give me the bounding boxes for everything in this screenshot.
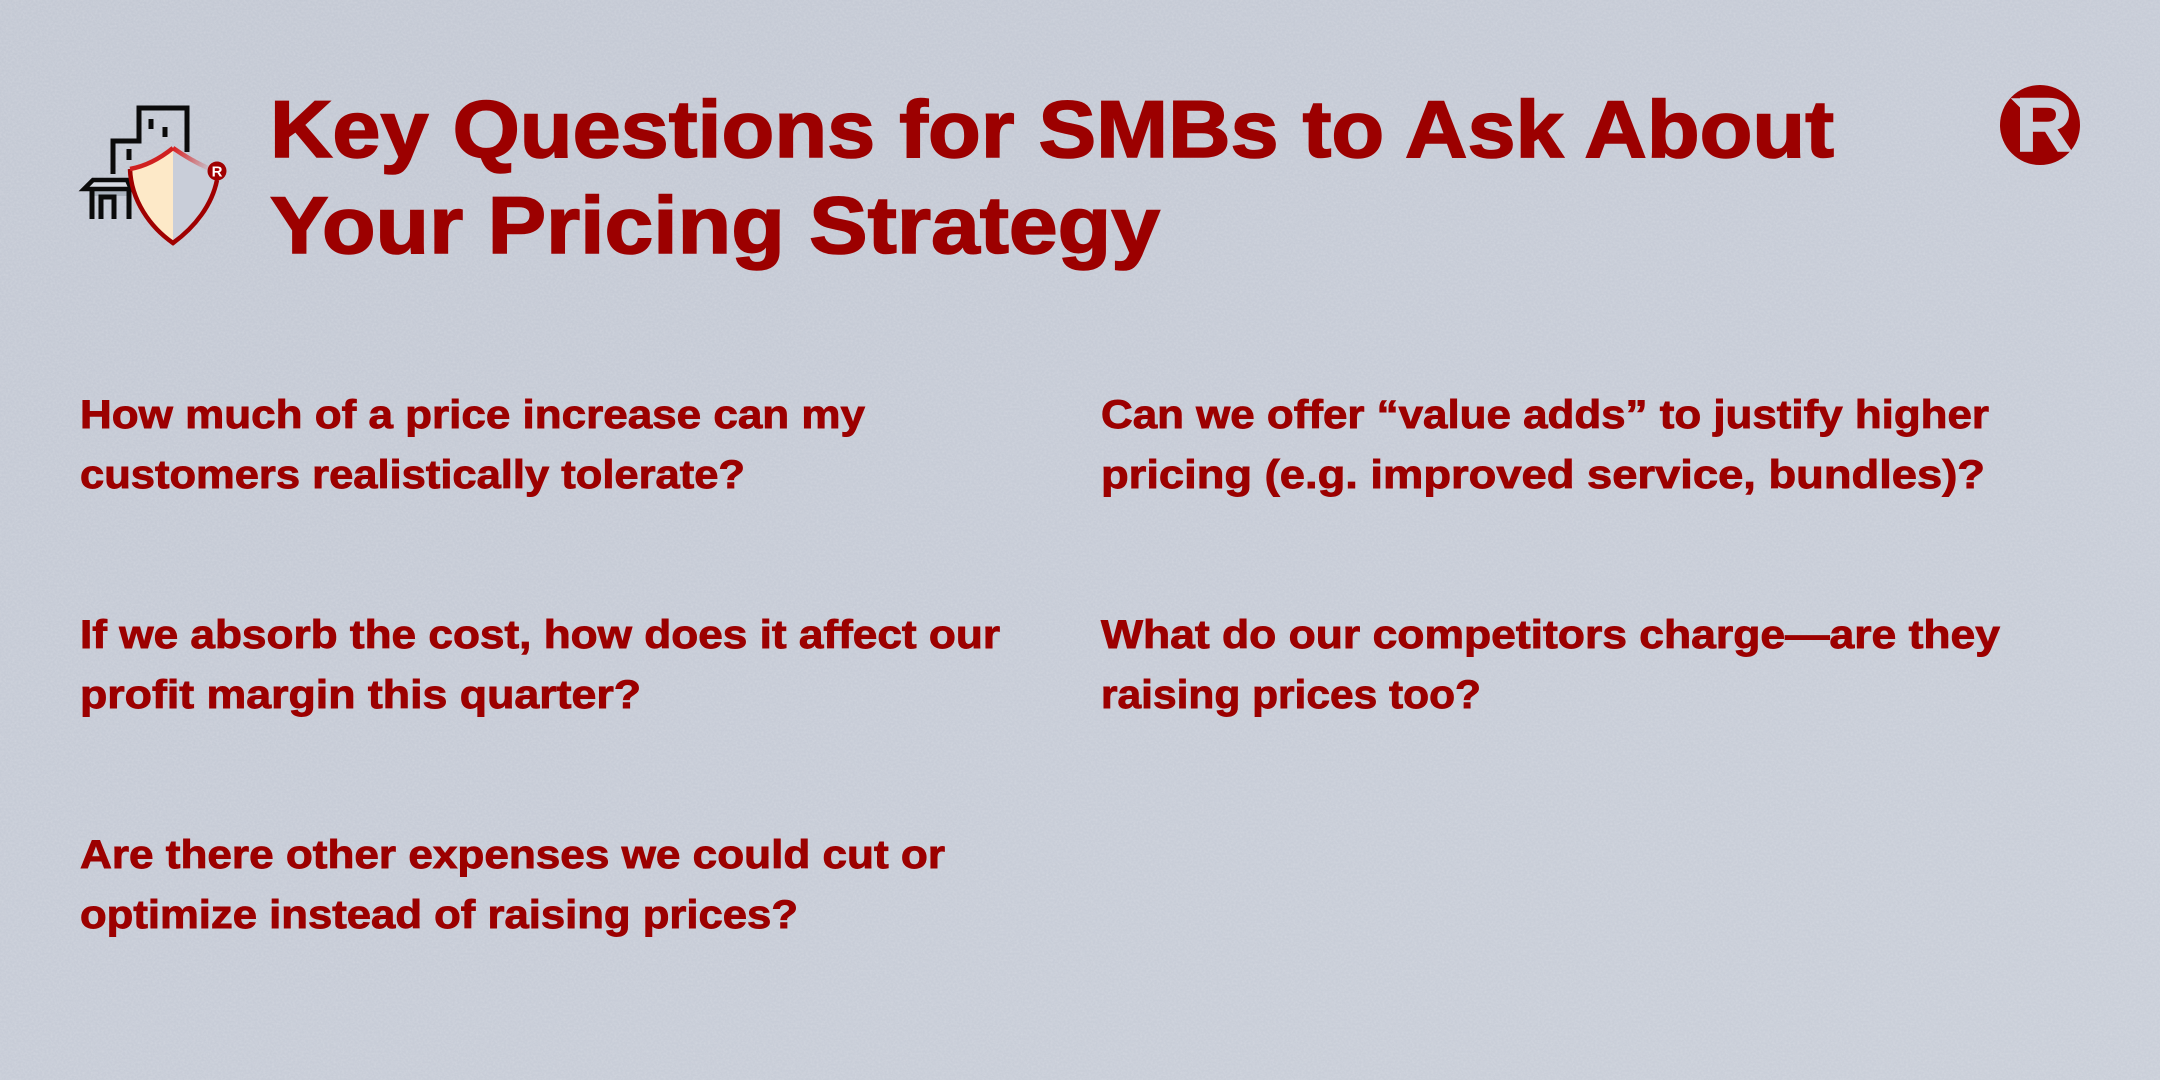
question: absorbing cost bbox=[80, 613, 1000, 717]
question: competitors: raising prices too? bbox=[1101, 673, 1481, 717]
icon part: building outline bbox=[113, 108, 187, 174]
title: Your Pricing Strategy bbox=[270, 181, 1160, 271]
question: value adds bbox=[1101, 393, 1989, 497]
question: other expenses: optimize instead of raising prices? bbox=[80, 893, 798, 937]
icon: building with shield bbox=[84, 108, 226, 243]
icon part: shield bbox=[130, 148, 217, 243]
question: price increase tolerance: customers realistically tolerate? bbox=[80, 453, 745, 497]
title bbox=[270, 85, 1834, 271]
question: competitors bbox=[1101, 613, 2001, 717]
question: value adds: pricing (e.g. improved service, bundles)? bbox=[1101, 453, 1985, 497]
question: other expenses: Are there other expenses we could cut or bbox=[80, 833, 945, 877]
icon part: R badge bbox=[208, 162, 226, 180]
question: price increase tolerance: How much of a price increase can my bbox=[80, 393, 866, 437]
question: absorbing cost: If we absorb the cost, how does it affect our bbox=[80, 613, 1000, 657]
question: competitors: What do our competitors charge—are they bbox=[1101, 613, 2001, 657]
icon part: storefront bbox=[84, 180, 131, 219]
logo: R in circle: R bbox=[2016, 83, 2072, 168]
question: price increase tolerance bbox=[80, 393, 866, 497]
question: value adds: Can we offer “value adds” to justify higher bbox=[1101, 393, 1989, 437]
icon part: R badge: R bbox=[212, 164, 223, 180]
question: other expenses bbox=[80, 833, 945, 937]
title: Key Questions for SMBs to Ask About bbox=[270, 85, 1834, 175]
logo: R in circle bbox=[2000, 83, 2080, 168]
question: absorbing cost: profit margin this quarter? bbox=[80, 673, 641, 717]
